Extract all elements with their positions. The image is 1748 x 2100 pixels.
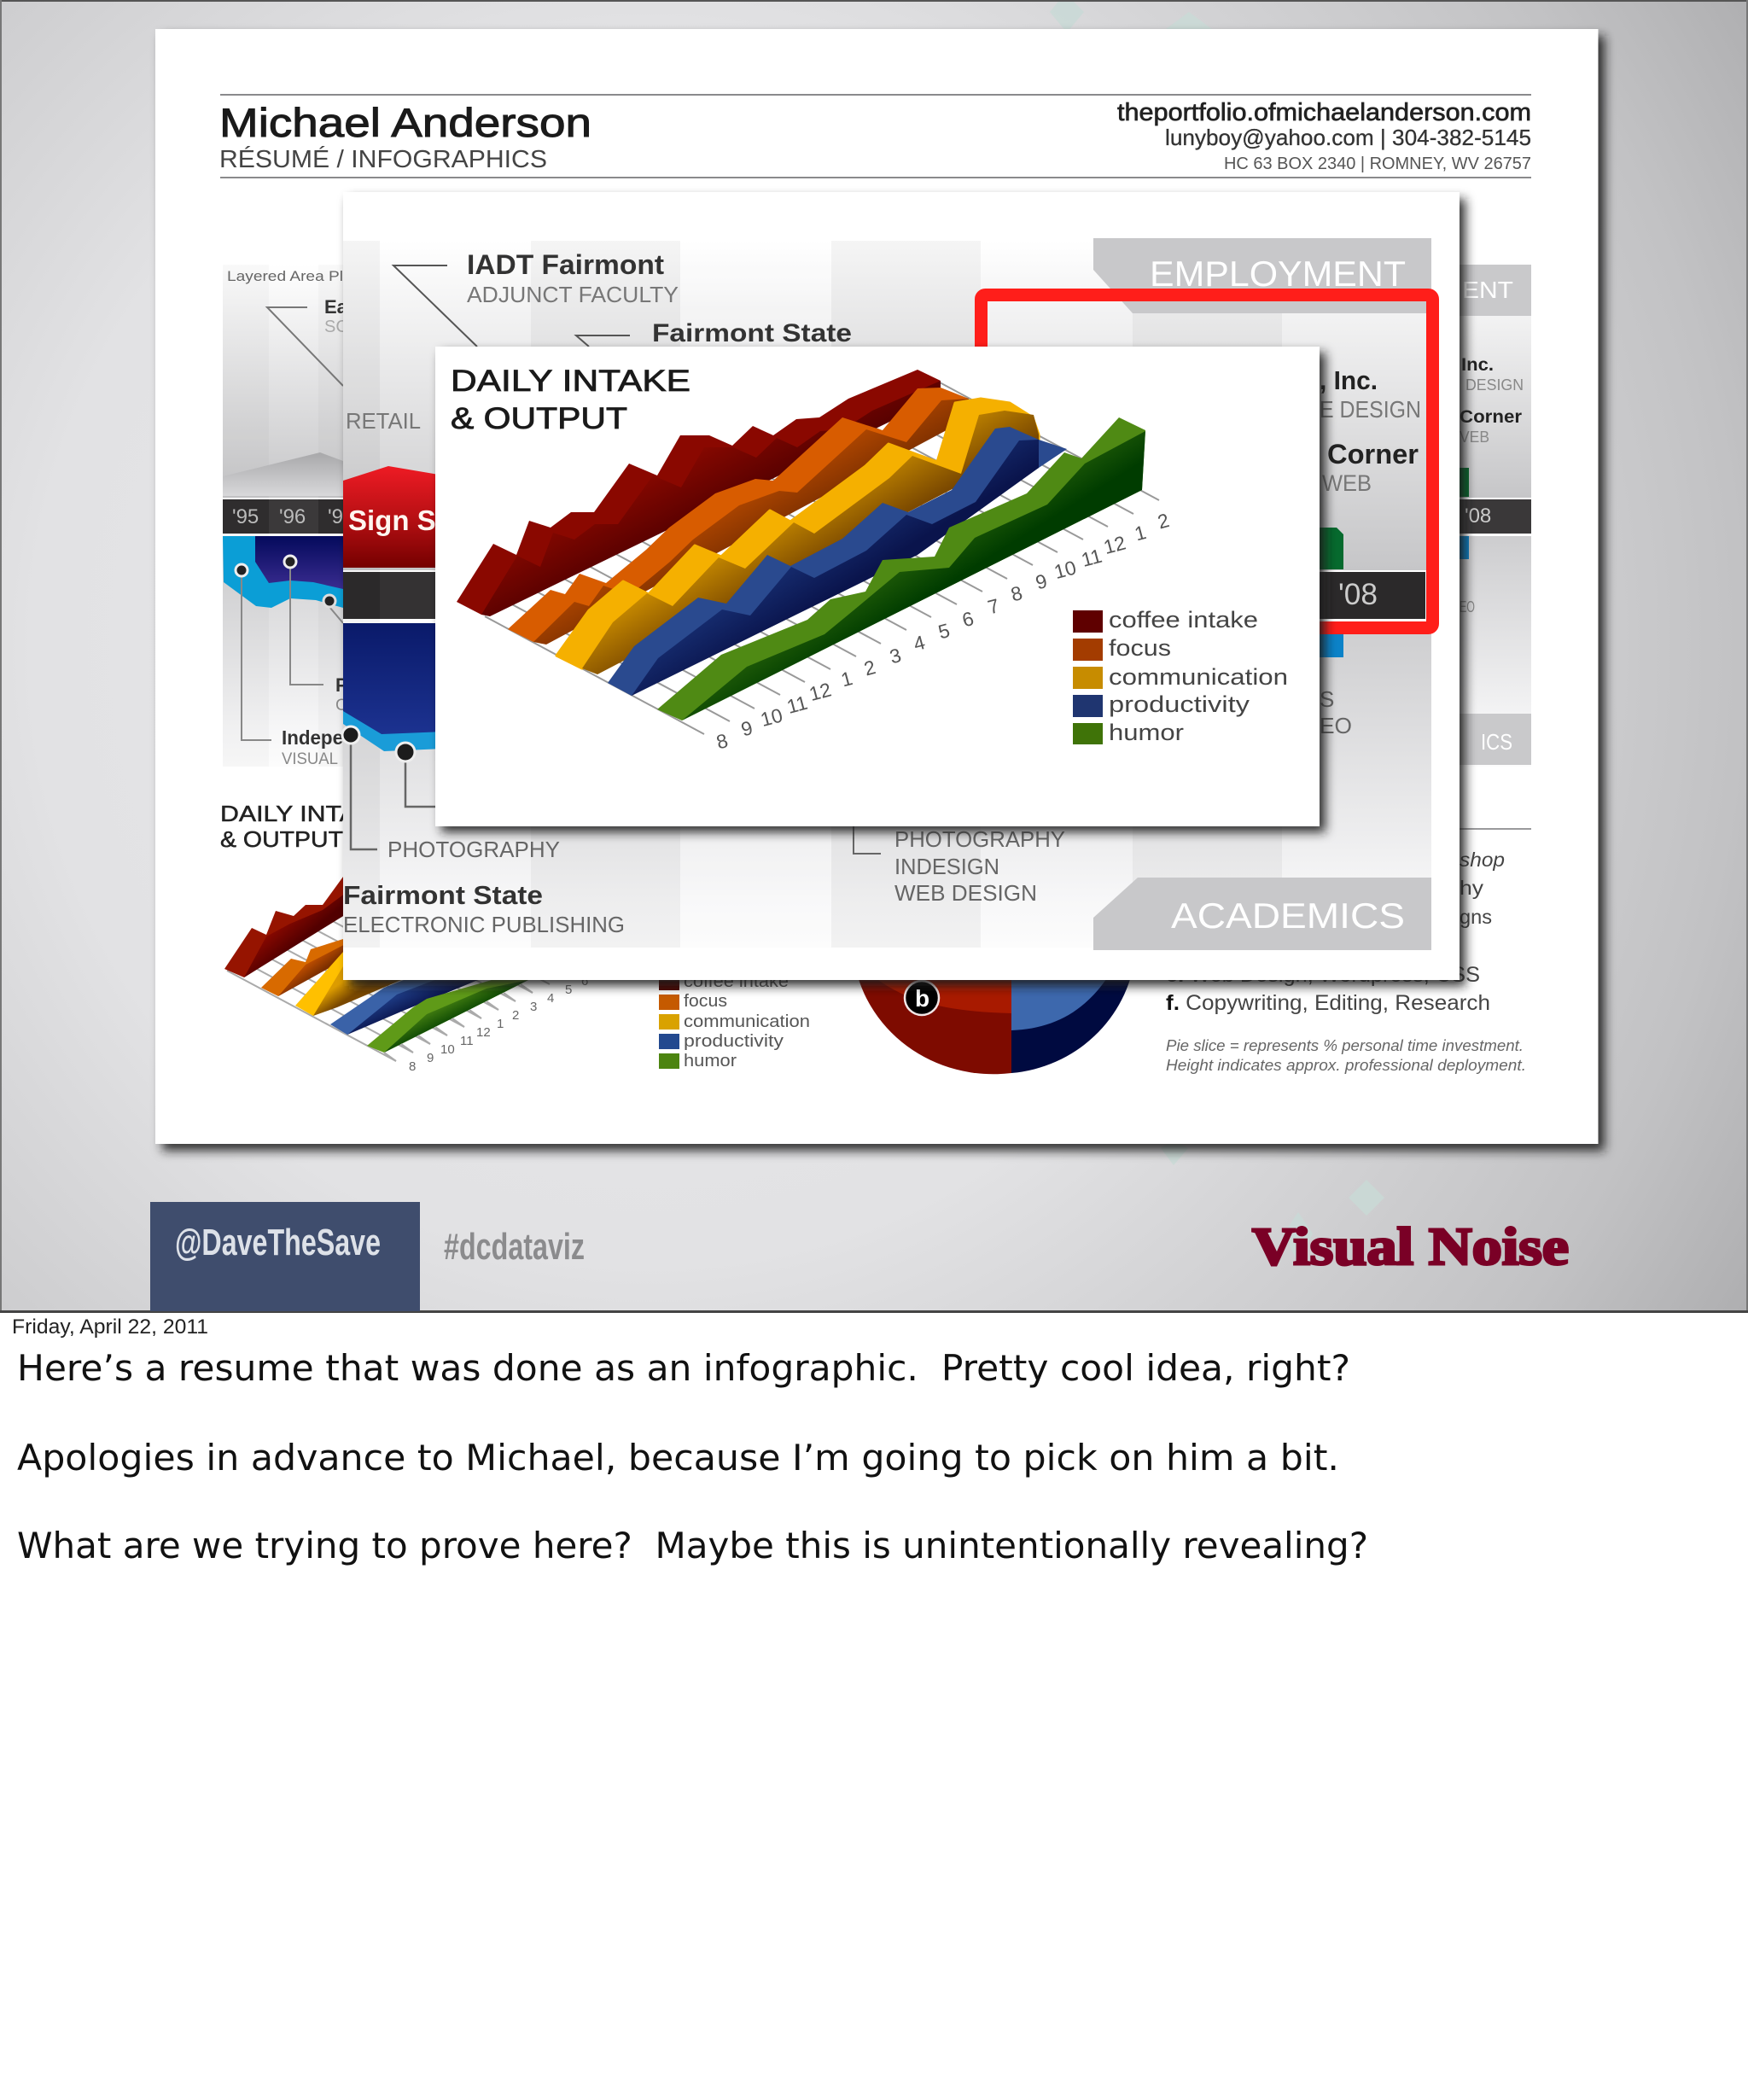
small chart legend: communication	[684, 1012, 810, 1031]
3D pie chart	[854, 956, 1135, 1074]
panel: daily intake and output enlarged	[435, 347, 1326, 832]
skills list: f. Copywriting, Editing, Research	[1166, 991, 1490, 1015]
small heading: daily intake	[220, 801, 358, 852]
axis numbers: 6	[959, 607, 976, 631]
red highlight frame	[982, 295, 1432, 628]
panel: resume sheet	[155, 29, 1605, 1151]
axis numbers: 11	[1079, 545, 1104, 571]
year bar: '08	[1338, 578, 1378, 611]
academics tab: ACADEMICS	[1171, 895, 1405, 936]
year bar right: '08	[1465, 505, 1491, 528]
footer: hashtag: #dcdataviz	[444, 1226, 585, 1268]
chart legend	[1073, 607, 1288, 745]
axis numbers: 4	[911, 631, 928, 655]
axis numbers: 12	[1101, 531, 1128, 558]
chart legend: productivity	[1109, 691, 1250, 717]
skills callout	[854, 826, 1065, 906]
year bar	[343, 572, 1425, 619]
blue layered area	[223, 536, 343, 740]
ribbon: communication	[556, 399, 1039, 674]
axis numbers: 9	[1033, 569, 1049, 593]
axis numbers: 11	[784, 691, 810, 718]
skills list	[1166, 829, 1531, 1015]
labels under timeline: VISUAL	[282, 750, 338, 768]
chart title	[451, 365, 690, 435]
axis numbers: 5	[935, 619, 952, 643]
axis numbers: 9	[738, 716, 755, 740]
chart legend: coffee intake	[1109, 607, 1258, 633]
right strip: job labels	[1455, 355, 1524, 615]
ribbon: focus	[508, 388, 969, 645]
skills callout: WEB DESIGN	[894, 880, 1037, 906]
right strip: academics tab	[1451, 714, 1531, 765]
right strip: academics tab: ICS	[1481, 729, 1512, 755]
skills list: shop	[1460, 849, 1505, 871]
Fairmont State lower label: Fairmont State	[343, 880, 543, 910]
callout: Fairmont State	[576, 319, 852, 347]
speaker notes: What are we trying to prove here? Maybe this is unintentionally revealing?	[17, 1525, 1368, 1566]
floor grid lines and ticks	[485, 382, 1159, 734]
contact: address: HC 63 BOX 2340 | ROMNEY, WV 26757	[1224, 155, 1531, 173]
footer: slide title: Visual Noise	[1252, 1218, 1569, 1276]
pie chart note: Pie slice = represents % personal time investment.	[1166, 1037, 1524, 1054]
chart legend: focus	[1109, 635, 1171, 661]
axis numbers: 7	[985, 594, 1001, 618]
axis numbers: 1	[1132, 521, 1148, 545]
callout: Fairmont State: Fairmont State	[652, 319, 852, 347]
employment tab: EMPLOYMENT	[1150, 254, 1406, 294]
right strip: employment tab text: ENT	[1462, 277, 1513, 303]
year bar left: '9	[328, 505, 343, 528]
small 3D ribbon chart: 12	[476, 1025, 491, 1040]
axis numbers: 1	[838, 667, 854, 691]
layered area plot label: Layered Area Pl	[227, 268, 343, 284]
small 3D ribbon chart: 6	[581, 974, 588, 989]
small 3D ribbon chart: 10	[440, 1042, 455, 1057]
job role label: SC	[324, 318, 348, 336]
skills list: hy	[1460, 877, 1484, 899]
labels under timeline	[282, 674, 348, 768]
ribbon: productivity	[608, 427, 1067, 696]
small chart legend: humor	[684, 1052, 737, 1070]
chart legend: communication	[1109, 664, 1288, 690]
heading: name: Michael Anderson	[219, 100, 591, 145]
right side employers	[1314, 365, 1421, 738]
small chart legend: productivity	[684, 1032, 784, 1051]
callout line	[267, 307, 343, 386]
employment tab	[1093, 238, 1431, 313]
right side employers: EO	[1320, 713, 1352, 738]
skills callout: INDESIGN	[894, 854, 999, 879]
right strip: job labels: Corner	[1460, 407, 1522, 427]
ribbon: coffee intake	[457, 370, 941, 616]
labels under timeline: C	[335, 697, 347, 715]
axis numbers: 3	[887, 644, 903, 668]
gray area plot	[223, 452, 343, 496]
axis numbers: 2	[861, 656, 877, 680]
labels under timeline: Indepe	[282, 726, 343, 749]
callout: IADT Fairmont: IADT Fairmont	[467, 249, 664, 280]
skills list: gns	[1460, 906, 1492, 928]
axis numbers: 8	[714, 729, 730, 753]
right side employers: WEB	[1322, 470, 1372, 496]
blue area with markers	[342, 623, 444, 849]
year bar left: '95	[232, 505, 259, 528]
pie chart note	[1166, 1037, 1526, 1074]
callout: IADT Fairmont	[393, 249, 679, 347]
Fairmont State lower label	[343, 880, 625, 937]
axis numbers: 10	[758, 703, 785, 731]
red area: sign shop	[343, 466, 453, 568]
small 3D ribbon chart: 9	[427, 1051, 434, 1065]
chart legend: humor	[1109, 720, 1184, 745]
small chart legend	[659, 972, 810, 1070]
small 3D ribbon chart: 5	[565, 983, 572, 997]
right side employers: Corner	[1327, 439, 1419, 470]
speaker notes	[17, 1347, 1368, 1566]
panel: enlarged timeline sheet	[342, 192, 1465, 986]
contact: website: theportfolio.ofmichaelanderson.com	[1117, 99, 1531, 126]
skills list: e. Web Design, Wordpress, CSS	[1166, 963, 1480, 987]
academics tab	[1093, 878, 1431, 950]
right side employers: E DESIGN	[1320, 396, 1421, 423]
axis numbers: 12	[807, 678, 834, 705]
small 3D ribbon chart	[224, 877, 588, 1074]
right strip: job labels: Inc.	[1461, 355, 1494, 375]
year bar left: '96	[279, 505, 306, 528]
axis numbers	[714, 509, 1171, 753]
right strip: job labels: VEB	[1460, 429, 1489, 446]
callout: IADT Fairmont: ADJUNCT FACULTY	[467, 282, 679, 307]
axis numbers: 10	[1052, 556, 1079, 583]
year bar left	[223, 499, 343, 534]
small heading: daily intake: DAILY INTA	[220, 801, 358, 826]
right strip: job labels: DESIGN	[1465, 376, 1524, 394]
right strip: job labels: EO	[1460, 598, 1475, 615]
footer: twitter handle box	[150, 1202, 420, 1311]
timeline columns	[343, 241, 1431, 948]
chart title: & OUTPUT	[451, 402, 627, 435]
axis numbers: 8	[1008, 581, 1024, 605]
axis numbers: 2	[1155, 509, 1171, 533]
small 3D ribbon chart: 2	[512, 1008, 519, 1023]
Fairmont State lower label: ELECTRONIC PUBLISHING	[343, 912, 625, 937]
small chart legend: focus	[684, 992, 727, 1011]
skills callout: PHOTOGRAPHY	[894, 826, 1065, 852]
speaker notes: Apologies in advance to Michael, because I’m going to pick on him a bit.	[17, 1437, 1339, 1479]
small 3D ribbon chart: 3	[530, 1000, 537, 1014]
chart title: DAILY INTAKE	[451, 365, 690, 398]
date stamp: Friday, April 22, 2011	[12, 1315, 208, 1339]
red area: sign shop: Sign Sh	[348, 505, 453, 536]
year bar right	[1451, 499, 1531, 534]
photography label: PHOTOGRAPHY	[387, 837, 560, 862]
right side employers: , Inc.	[1320, 365, 1378, 395]
labels under timeline: P	[335, 674, 348, 696]
subheading: RÉSUMÉ / INFOGRAPHICS	[219, 145, 547, 173]
small 3D ribbon chart: 1	[497, 1017, 504, 1031]
contact: email and phone: lunyboy@yahoo.com | 304-382-5145	[1165, 125, 1531, 150]
right side employers: S	[1320, 686, 1334, 712]
ribbon: humor	[657, 417, 1145, 720]
small 3D ribbon chart: 8	[409, 1059, 416, 1074]
footer: twitter handle box: @DaveTheSave	[175, 1222, 381, 1263]
speaker notes: Here’s a resume that was done as an infographic. Pretty cool idea, right?	[17, 1347, 1350, 1389]
3D pie chart: b	[915, 985, 929, 1012]
small 3D ribbon chart: 11	[460, 1034, 474, 1048]
timeline columns behind chart	[223, 265, 1531, 767]
job label: Ea	[324, 296, 348, 318]
small heading: daily intake: & OUTPUT	[220, 826, 343, 852]
small 3D ribbon chart: 4	[547, 991, 554, 1006]
retail label: RETAIL	[346, 408, 421, 434]
small chart legend: coffee intake	[684, 972, 789, 991]
slide background	[0, 0, 1748, 1313]
pie chart note: Height indicates approx. professional deployment.	[1166, 1057, 1526, 1074]
